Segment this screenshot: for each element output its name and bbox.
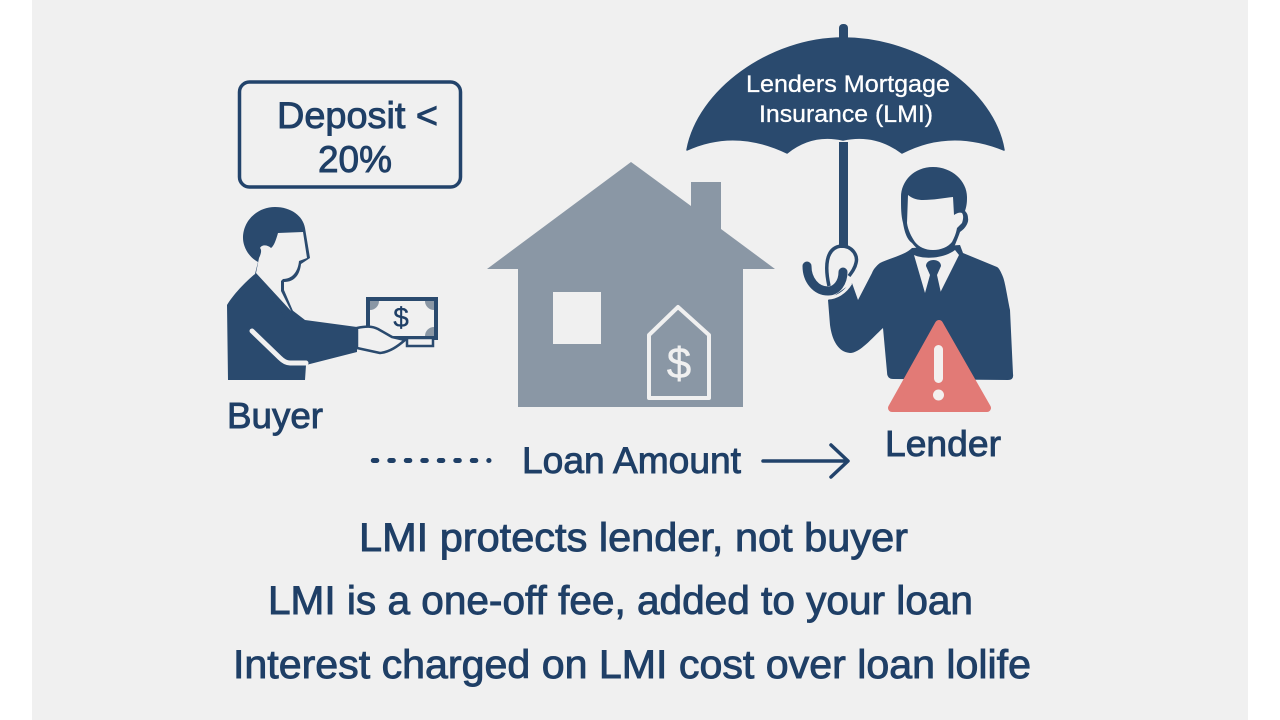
icon: lender bbox=[828, 167, 1013, 380]
banknote bbox=[368, 299, 436, 338]
lender body bbox=[828, 245, 1013, 380]
umbrella label: Lenders Mortgage bbox=[746, 71, 950, 98]
handle hook bbox=[807, 266, 843, 291]
buyer head bbox=[243, 207, 310, 318]
handle halo bbox=[828, 283, 851, 298]
umbrella label bbox=[746, 71, 950, 128]
deposit callout: 20% bbox=[318, 139, 392, 180]
house window bbox=[553, 292, 601, 344]
key points: LMI is a one-off fee, added to your loan bbox=[268, 579, 973, 623]
hand loop bbox=[827, 246, 856, 286]
price tag bbox=[649, 307, 709, 398]
icon: house bbox=[487, 162, 775, 407]
icon: warning triangle bbox=[892, 324, 987, 408]
loan amount flow: Loan Amount bbox=[522, 440, 742, 481]
dotted line bbox=[373, 458, 489, 463]
price tag: $ bbox=[667, 339, 691, 388]
umbrella spike bbox=[839, 24, 848, 44]
buyer face bbox=[256, 232, 307, 311]
key points: LMI protects lender, not buyer bbox=[359, 516, 908, 560]
umbrella shaft bbox=[839, 142, 848, 248]
banknote: $ bbox=[393, 302, 409, 333]
arrow bbox=[763, 445, 848, 477]
icon: buyer handing over money bbox=[227, 207, 436, 380]
lender face bbox=[907, 195, 963, 250]
buyer hand bbox=[357, 327, 405, 353]
lender tie bbox=[925, 260, 941, 293]
icon: umbrella handle bbox=[807, 246, 856, 298]
loan amount flow bbox=[373, 440, 848, 481]
key points bbox=[233, 516, 1031, 687]
lender label: Lender bbox=[885, 423, 1001, 464]
icon: umbrella bbox=[687, 24, 1004, 248]
deposit callout bbox=[240, 82, 460, 187]
lender head bbox=[901, 167, 968, 254]
key points: Interest charged on LMI cost over loan lolife bbox=[233, 643, 1031, 687]
buyer label: Buyer bbox=[227, 395, 323, 436]
deposit callout: Deposit < bbox=[277, 95, 438, 136]
second note edge bbox=[407, 338, 433, 346]
buyer arm crease bbox=[252, 331, 306, 363]
buyer body bbox=[227, 274, 357, 380]
lender shirt bbox=[914, 250, 959, 293]
umbrella canopy bbox=[687, 38, 1004, 153]
umbrella label: Insurance (LMI) bbox=[759, 101, 933, 128]
